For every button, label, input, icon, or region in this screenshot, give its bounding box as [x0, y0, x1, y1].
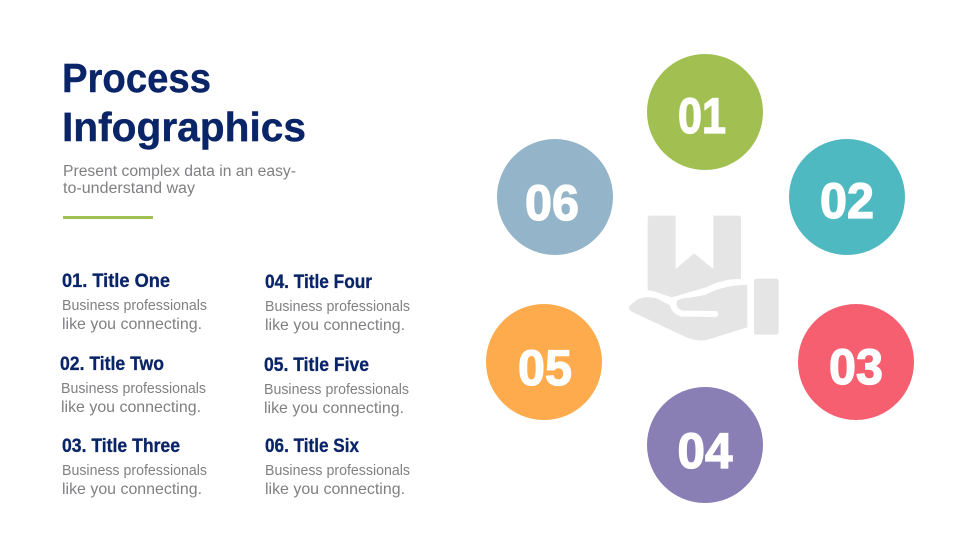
item 05: 05. Title Five — [264, 355, 369, 376]
item 04: Business professionals — [265, 299, 410, 315]
title: Process — [62, 55, 211, 101]
item 03 — [62, 436, 207, 498]
item 06: like you connecting. — [265, 481, 405, 498]
item 03: 03. Title Three — [62, 436, 180, 457]
item 02 — [60, 354, 206, 416]
step 03 circle — [798, 304, 914, 420]
icon: hand holding book — [629, 216, 779, 341]
item 02: like you connecting. — [61, 399, 201, 416]
title: Infographics — [62, 104, 306, 150]
step 03 circle: 03 — [829, 339, 883, 395]
item 04 — [265, 272, 410, 334]
item 03: Business professionals — [62, 463, 207, 479]
item 05 — [264, 355, 409, 417]
step 01 circle — [647, 54, 763, 170]
item 06: 06. Title Six — [265, 436, 359, 457]
item 06: Business professionals — [265, 463, 410, 479]
item 06 — [265, 436, 410, 498]
step 04 circle — [647, 387, 763, 503]
subtitle — [63, 163, 296, 197]
step 06 circle: 06 — [525, 175, 579, 231]
step 02 circle: 02 — [820, 173, 874, 229]
subtitle: to-understand way — [63, 180, 195, 197]
step 05 circle: 05 — [518, 340, 572, 396]
item 04: like you connecting. — [265, 317, 405, 334]
step 01 circle: 01 — [678, 88, 726, 144]
step 06 circle — [497, 139, 613, 255]
item 05: Business professionals — [264, 382, 409, 398]
item 02: 02. Title Two — [60, 354, 164, 375]
item 01: 01. Title One — [62, 271, 170, 292]
step 05 circle — [486, 304, 602, 420]
item 05: like you connecting. — [264, 400, 404, 417]
accent underline — [63, 216, 153, 219]
item 04: 04. Title Four — [265, 272, 373, 293]
item 02: Business professionals — [61, 381, 206, 397]
item 01: Business professionals — [62, 298, 207, 314]
item 01: like you connecting. — [62, 316, 202, 333]
step 02 circle — [789, 139, 905, 255]
subtitle: Present complex data in an easy- — [63, 163, 296, 180]
item 03: like you connecting. — [62, 481, 202, 498]
step 04 circle: 04 — [678, 423, 733, 479]
title — [62, 55, 306, 150]
item 01 — [62, 271, 207, 333]
